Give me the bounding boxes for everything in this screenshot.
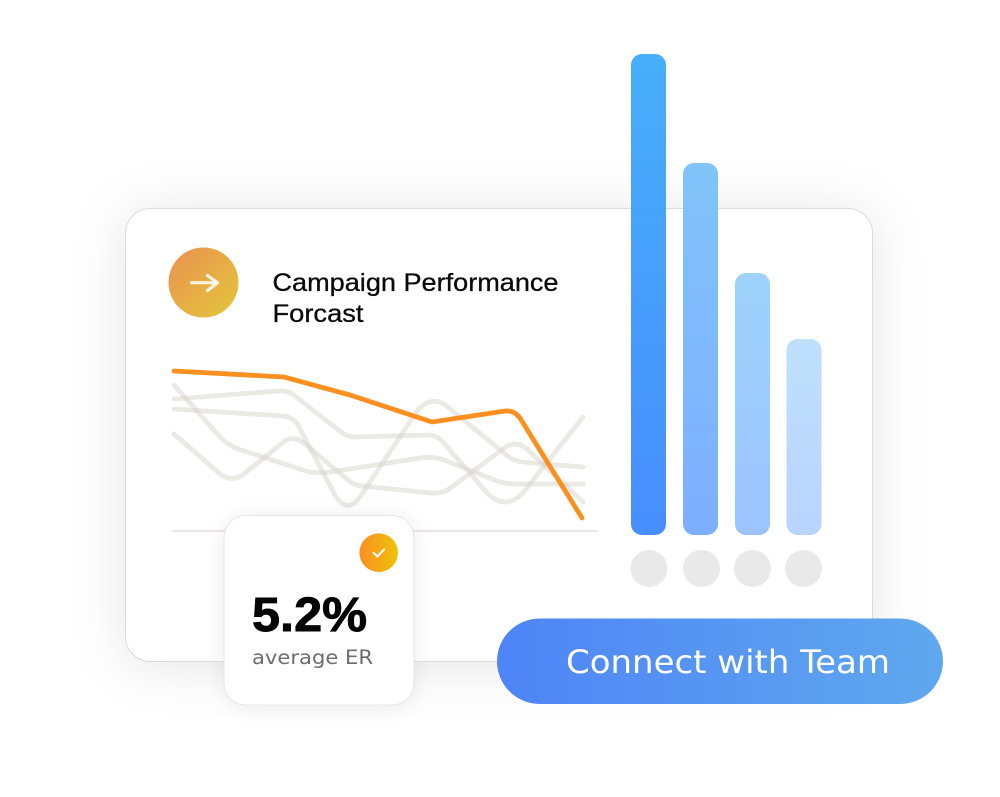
button label: Connect with Team	[566, 643, 890, 681]
heading: chart title: Campaign Performance	[272, 269, 558, 297]
orange series line	[174, 371, 582, 518]
bar chart	[630, 54, 822, 587]
icon: arrow in orange circle	[168, 248, 238, 318]
line chart	[173, 371, 597, 531]
chart baseline	[173, 530, 597, 532]
icon: check badge	[359, 533, 398, 572]
bar 1	[631, 54, 666, 535]
bar 3	[735, 273, 770, 535]
metric label: average ER	[252, 646, 373, 669]
panel: average ER card	[224, 516, 414, 705]
button: connect with team	[497, 618, 943, 704]
bar 2	[683, 163, 718, 535]
bar labels placeholders	[630, 550, 822, 587]
heading: chart title: Forcast	[272, 300, 364, 328]
bar 4	[786, 339, 822, 535]
metric value: 5.2%	[252, 589, 367, 642]
panel: main card	[126, 208, 872, 662]
grey series lines	[174, 385, 583, 506]
